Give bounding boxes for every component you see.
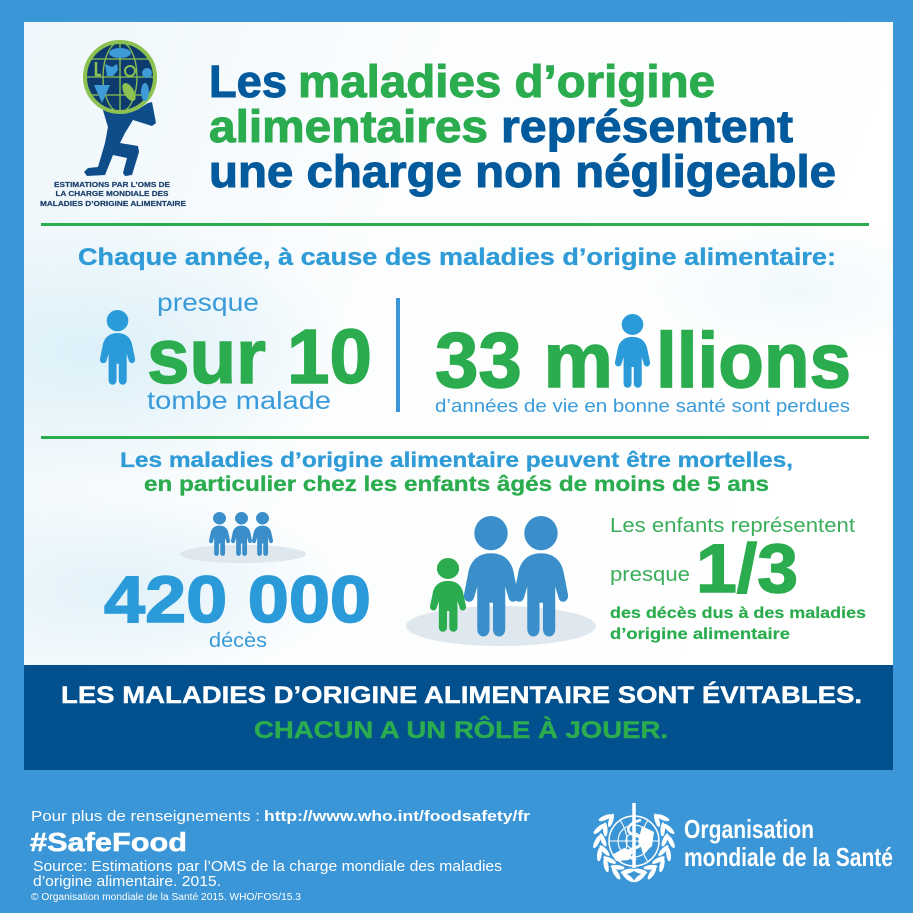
subheading: each year: Chaque année, à cause des maladies d’origine alimentaire: [78,244,836,271]
stat: 33 million healthy life years lost [435,314,851,416]
footer information: http://www.who.int/foodsafety/fr [264,808,530,825]
stat: 1 in 10 falls ill: presque [157,289,259,317]
stat: children are one third: presque [610,564,690,586]
stat: children are one third: d’origine alimentaire [610,626,790,643]
footer information: Pour plus de renseignements : [31,808,260,825]
stat: 420 000 deaths [104,512,371,652]
WHO name: Organisation [684,814,814,844]
stat: 1 in 10 falls ill: tombe malade [147,387,331,415]
stat: 33 million healthy life years lost: d’années de vie en bonne santé sont perdues [435,396,850,416]
stat: children are one third: des décès dus à des maladies [610,605,866,622]
footer information: © Organisation mondiale de la Santé 2015. WHO/FOS/15.3 [31,892,301,903]
title: représentent [501,101,793,152]
stat: children are one third: 1/3 [696,530,798,607]
stat: 1 in 10 falls ill: sur 10 [147,314,372,400]
WHO name [684,814,893,872]
logo: globe carried by kneeling figure [40,42,186,208]
logo: globe carried by kneeling figure: LA CHARGE MONDIALE DES [56,189,168,198]
WHO emblem [592,803,676,884]
title: maladies d’origine [298,56,715,107]
footer information: Source: Estimations par l’OMS de la charge mondiale des maladies [33,858,502,875]
subheading: can be fatal: en particulier chez les enfants âgés de moins de 5 ans [144,473,769,496]
logo: globe carried by kneeling figure: MALADIES D’ORIGINE ALIMENTAIRE [40,199,186,208]
logo: globe carried by kneeling figure: ESTIMATIONS PAR L’OMS DE [54,180,170,189]
footer information: d’origine alimentaire. 2015. [33,873,221,890]
stat: 33 million healthy life years lost: 33 m [435,316,613,404]
banner: preventable [24,665,893,770]
title: Les [209,56,287,107]
banner: preventable: CHACUN A UN RÔLE À JOUER. [254,716,668,744]
title: une charge non négligeable [209,146,836,197]
stat: 1 in 10 falls ill [100,289,372,415]
stat: children are one third [610,515,866,643]
title [209,56,836,197]
stat: 33 million healthy life years lost: llions [656,316,851,404]
subheading: can be fatal: Les maladies d’origine alimentaire peuvent être mortelles, [120,449,793,472]
footer information: #SafeFood [30,827,187,857]
icon: child and two adults [406,516,596,646]
main white panel [24,22,893,665]
stat: 420 000 deaths: 420 000 [104,562,371,636]
title: alimentaires [209,101,488,152]
stat: 420 000 deaths: décès [209,630,267,652]
subheading: can be fatal [120,449,793,496]
stat: children are one third: Les enfants représentent [610,515,855,537]
banner: preventable: LES MALADIES D’ORIGINE ALIMENTAIRE SONT ÉVITABLES. [61,681,862,709]
footer information [30,808,530,903]
